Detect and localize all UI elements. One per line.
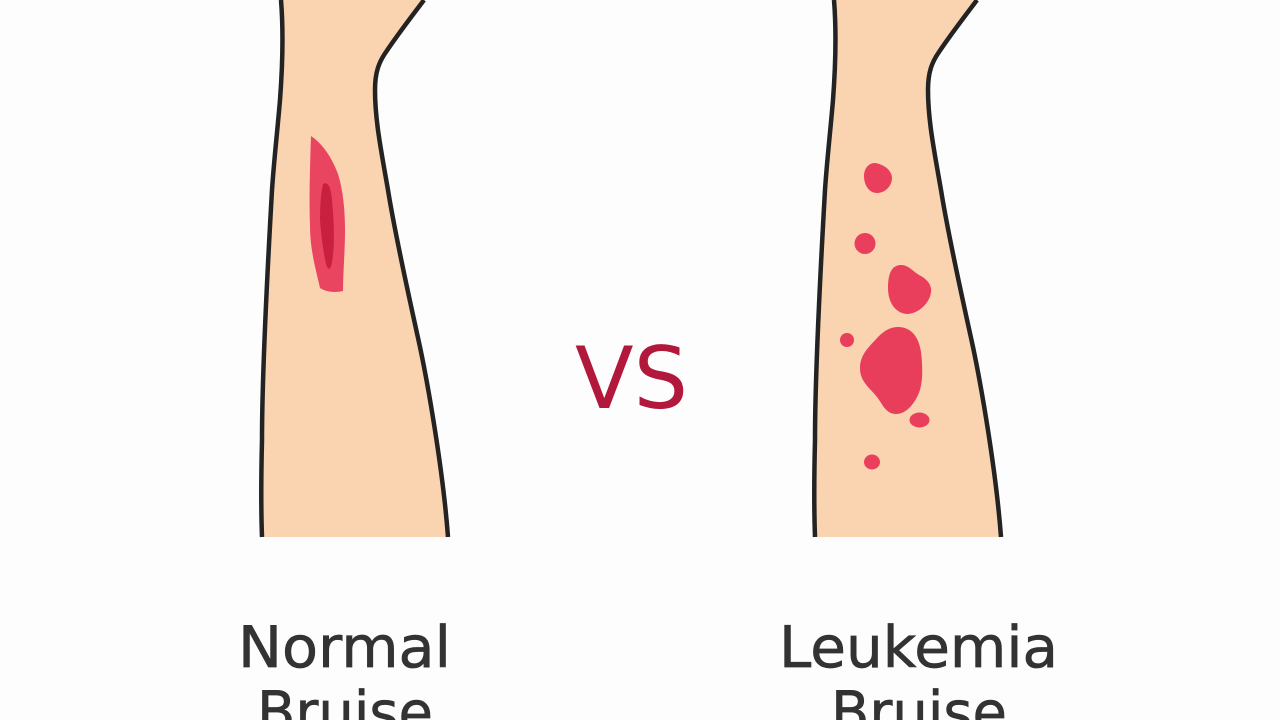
bruise spot 5 (840, 333, 854, 347)
normal bruise inner (320, 183, 334, 269)
panel: leukemia bruise arm (814, 0, 1001, 537)
bruise spot 4 large (860, 327, 922, 414)
arm skin (261, 0, 448, 537)
heading: leukemia bruise: Leukemia (779, 615, 1058, 681)
bruise spot 2 (854, 233, 876, 254)
heading: leukemia bruise (779, 615, 1058, 720)
bruise spot 7 (864, 454, 880, 470)
vs label: VS (575, 329, 688, 429)
arm skin (814, 0, 1001, 537)
arm left outline (261, 0, 282, 537)
arm left outline (814, 0, 835, 537)
arm right outline (928, 0, 1001, 537)
bruise spot 1 (864, 163, 892, 193)
heading: normal bruise: Normal (238, 615, 451, 681)
bruise spot 6 (910, 412, 930, 428)
arm right outline (375, 0, 448, 537)
heading: normal bruise (238, 615, 451, 720)
panel: normal bruise arm (261, 0, 448, 537)
normal bruise outer (310, 136, 345, 292)
bruise spot 3 (888, 265, 931, 314)
